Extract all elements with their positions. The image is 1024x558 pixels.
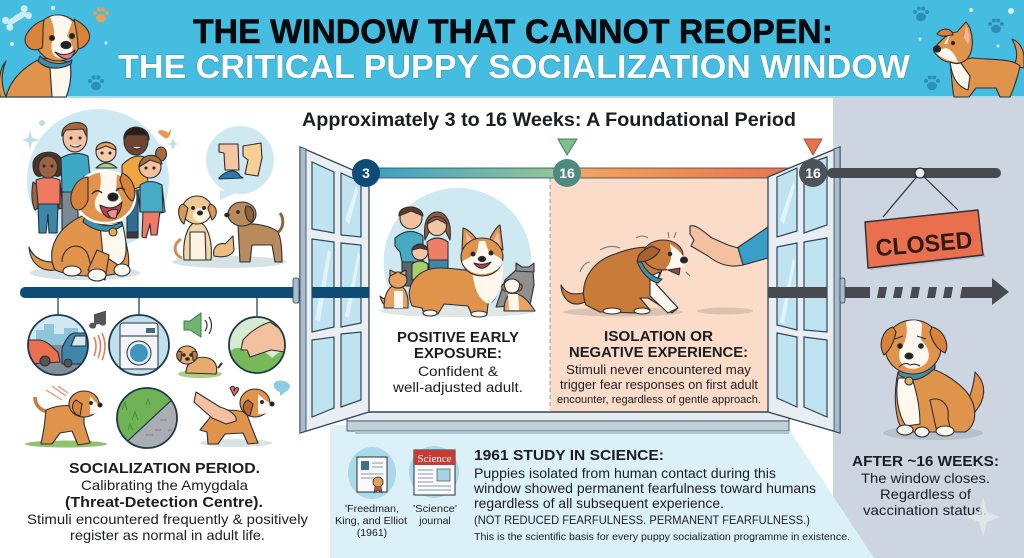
icon: blue paw right middle: [988, 18, 1004, 33]
corgi body: [409, 268, 499, 315]
timeline: dark closed segment: [827, 168, 1001, 178]
illustration: fearful dog: [561, 232, 753, 316]
text: isolation or negative experience: Stimuli never encountered may: [566, 363, 752, 377]
text: socialization period: Stimuli encountered frequently & positively: [27, 511, 308, 527]
icon: small puppy listening: [177, 346, 222, 378]
stems from bar to stimuli icons: [58, 298, 257, 316]
caption: Freedman, King, and Elliot: 'Freedman,: [345, 503, 399, 515]
icon: right header dog: [933, 22, 1024, 97]
text: positive early exposure: Confident &: [418, 363, 499, 379]
text: positive early exposure: well-adjusted adult.: [392, 379, 523, 395]
person: woman left: [32, 152, 63, 233]
icon: cars and traffic: [28, 315, 88, 375]
icon: washing machine: [109, 315, 169, 375]
person: man: [395, 207, 423, 286]
panel: 1961 study background: [330, 425, 874, 558]
title line 2: THE CRITICAL PUPPY SOCIALIZATION WINDOW: [118, 48, 911, 85]
text: socialization period: [27, 460, 308, 543]
text: isolation or negative experience: NEGATIVE EXPERIENCE:: [569, 345, 748, 361]
icon: blue paw right bottom: [924, 76, 940, 90]
closed sign: CLOSED: [874, 227, 973, 262]
bar through left door: [312, 287, 369, 298]
text: positive early exposure: [392, 330, 523, 395]
header banner: [0, 0, 1024, 98]
main puppy sitting: [29, 170, 140, 281]
icon: sound waves: [94, 333, 105, 360]
text: isolation or negative experience: encounter, regardless of gentle approach.: [557, 394, 761, 406]
text: 1961 study in Science: This is the scientific basis for every puppy socialization programme in existence.: [474, 531, 850, 543]
person: toddler: [96, 142, 117, 168]
icon: blue paw right top: [913, 6, 929, 21]
cat: [496, 263, 534, 307]
person: boy: [412, 244, 428, 280]
caption: Freedman, King, and Elliot: (1961): [357, 527, 387, 539]
illustration: approaching hand: [690, 226, 768, 266]
caption: Science journal: [413, 503, 457, 527]
panel: after window closes background: [833, 97, 1024, 558]
text: isolation or negative experience: trigger fear responses on first adult: [560, 378, 759, 392]
bar through right door: [768, 287, 827, 298]
person: dark haired man: [122, 127, 149, 238]
sparkle: [966, 497, 1000, 537]
illustration: puppies meeting: [172, 196, 286, 268]
icon: researcher certificate: [348, 447, 396, 499]
icon: science journal: [409, 446, 459, 498]
panel: isolation or negative experience: [550, 178, 768, 412]
text: isolation or negative experience: ISOLATION OR: [604, 329, 714, 345]
text: 1961 study in Science: 1961 STUDY IN SCIENCE:: [474, 447, 664, 464]
caption: Freedman, King, and Elliot: [335, 503, 407, 539]
text: isolation or negative experience: [557, 329, 761, 406]
text: after 16 weeks: AFTER ~16 WEEKS:: [852, 453, 999, 470]
illustration: sad puppy: [881, 320, 984, 440]
text: after 16 weeks: vaccination status.: [863, 502, 987, 518]
subheading: Approximately 3 to 16 Weeks: A Foundational Period: [302, 110, 796, 131]
caption: Science journal: 'Science': [413, 503, 457, 515]
marker: week 3: [352, 159, 380, 187]
marker: week 3: 3: [362, 165, 370, 181]
text: after 16 weeks: [852, 453, 1000, 537]
closed sign: [865, 168, 986, 270]
text: 1961 study in Science: [473, 447, 850, 543]
person: man: [61, 122, 91, 230]
icon: hand petting puppy: [194, 381, 290, 447]
caption: Freedman, King, and Elliot: King, and Elliot: [335, 515, 407, 527]
title line 1: THE WINDOW THAT CANNOT REOPEN:: [193, 13, 833, 51]
icon: grass and pavement textures: [117, 388, 177, 451]
text: socialization period: register as normal in adult life.: [70, 527, 265, 543]
icon: bone: [1, 4, 33, 32]
text: after 16 weeks: Regardless of: [880, 486, 971, 502]
icon: walking puppy on grass: [25, 386, 107, 448]
person: woman: [425, 212, 450, 270]
icon: music note: [90, 312, 105, 328]
text: after 16 weeks: The window closes.: [861, 470, 990, 486]
illustration: family with puppy: [22, 109, 179, 281]
panel: positive early exposure: [369, 178, 550, 412]
icon: left header puppy: [0, 15, 90, 97]
text: 1961 study in Science: window showed permanent fearfulness toward humans: [473, 481, 816, 496]
icon: science journal: Science: [418, 453, 452, 465]
timeline: blue to green segment: [367, 168, 557, 178]
illustration: corgi with family: [380, 188, 536, 317]
marker: week 16 green: 16: [559, 165, 575, 181]
text: 1961 study in Science: regardless of all subsequent experience.: [474, 496, 724, 511]
decoration sparkles and heart: [22, 120, 179, 150]
text: positive early exposure: POSITIVE EARLY: [397, 330, 519, 346]
hinge right: [840, 278, 845, 303]
arrow: dashed timeline after window closes: [845, 278, 1009, 305]
icon: blue paw left: [88, 76, 104, 90]
icon: speaker: [184, 313, 212, 337]
right open window door: [768, 147, 845, 433]
marker: week 16 orange: [799, 139, 827, 187]
text: positive early exposure: EXPOSURE:: [414, 346, 502, 362]
corgi head: [462, 228, 479, 250]
text: socialization period: (Threat-Detection Centre).: [65, 494, 263, 511]
text: 1961 study in Science: (NOT REDUCED FEARFULNESS. PERMANENT FEARFULNESS.): [474, 513, 810, 527]
text: 1961 study in Science: Puppies isolated from human contact during this: [474, 466, 776, 481]
marker: week 16 green: [553, 139, 581, 187]
caption: Science journal: journal: [418, 515, 451, 527]
timeline bar: socialization period: [20, 287, 300, 298]
small dots decorating header: [10, 6, 1014, 48]
left open window door: [293, 147, 369, 433]
hinge left: [293, 278, 299, 303]
small dog right: [502, 279, 535, 311]
small dog left: [380, 270, 408, 308]
icon: orange paw: [93, 8, 109, 22]
timeline: orange segment: [575, 168, 805, 178]
person: girl right: [138, 147, 166, 238]
speech bubble with faces: [206, 126, 274, 200]
marker: week 16 orange: 16: [805, 165, 821, 181]
text: socialization period: Calibrating the Amygdala: [81, 477, 248, 493]
window sill: [347, 412, 789, 434]
icon: hand on grass: [229, 317, 285, 373]
text: socialization period: SOCIALIZATION PERIOD.: [69, 460, 260, 477]
